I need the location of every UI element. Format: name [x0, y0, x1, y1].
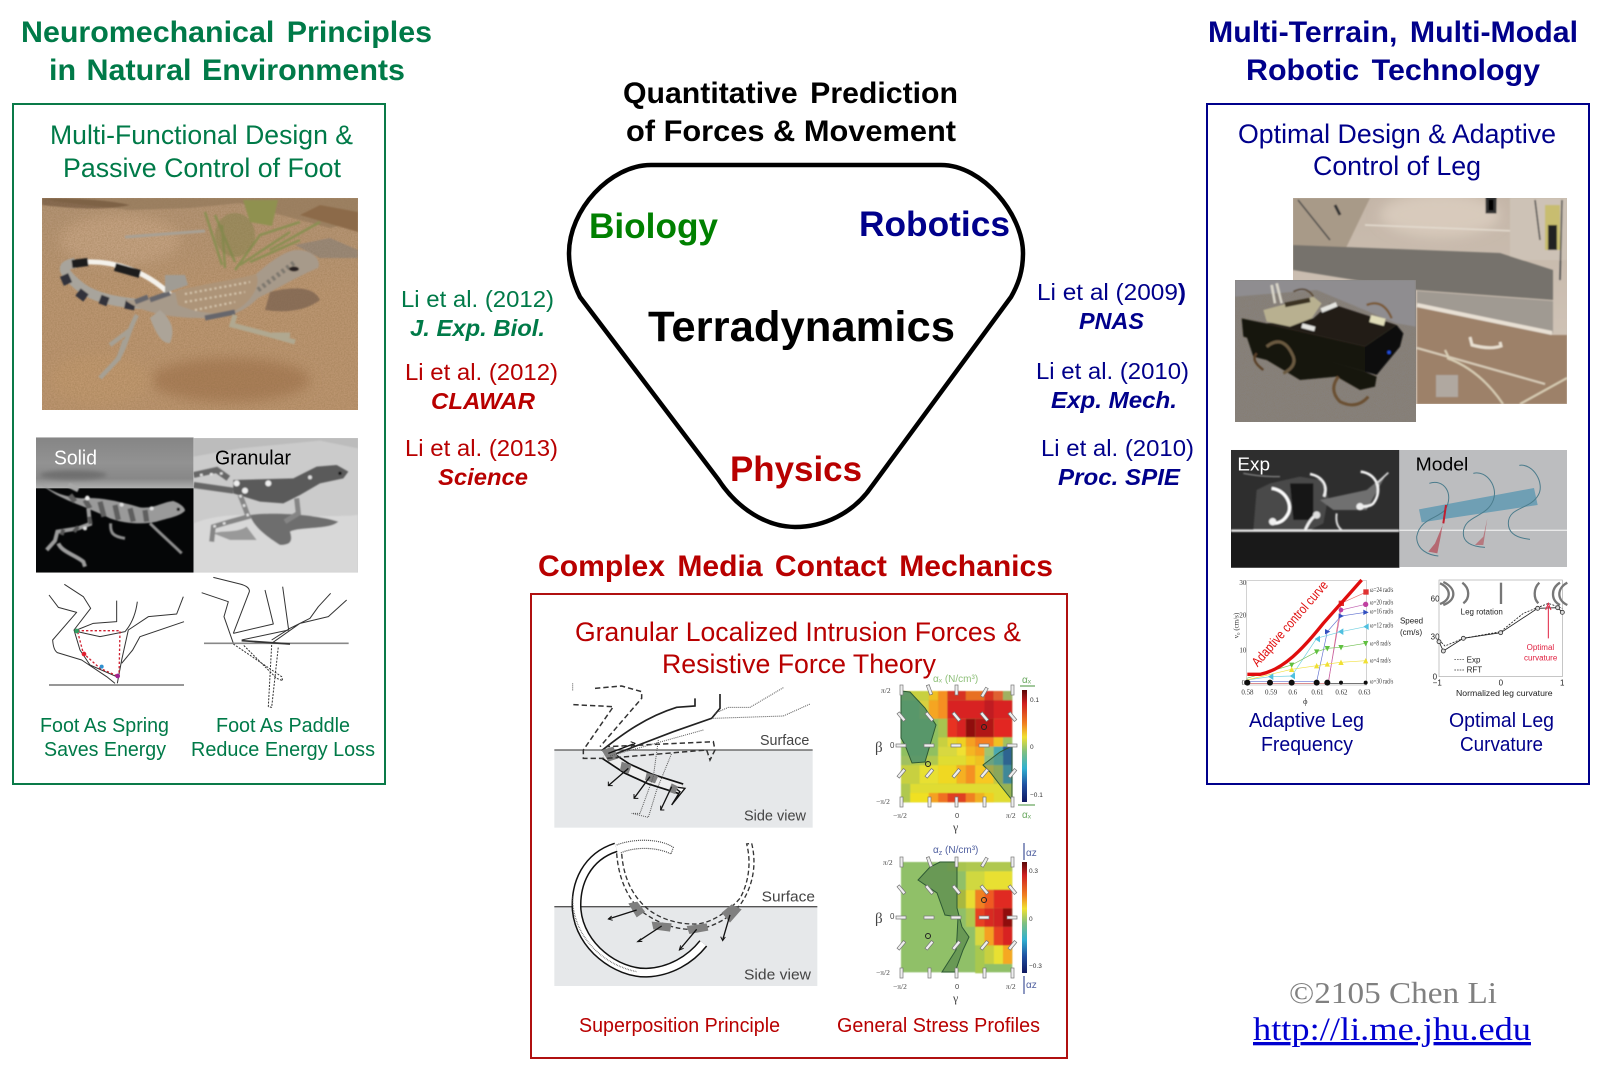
panel heading: Multi-Functional Design &	[50, 120, 353, 150]
chart: stress profile alpha z	[875, 843, 1042, 1005]
diagram: superposition c-shaped leg: Surface	[762, 890, 815, 906]
colorbar: 0.1	[1030, 697, 1039, 704]
citation: j exp biol: J. Exp. Biol.	[410, 315, 545, 341]
image: experiment x-ray: Exp	[1237, 454, 1270, 475]
panel heading	[1238, 119, 1556, 181]
citation: science: Science	[438, 464, 528, 490]
axis labels	[875, 674, 1032, 834]
axis labels: α	[933, 845, 939, 856]
caption: optimal leg curvature: Optimal Leg	[1449, 710, 1554, 732]
chart: adaptive leg frequency: 0.58	[1241, 689, 1254, 697]
diagram: superposition side view leg: Surface	[760, 733, 809, 749]
lizard legs	[150, 310, 172, 343]
citation: exp mech	[1036, 358, 1189, 413]
axis labels: π/2	[1006, 811, 1016, 820]
chart: adaptive leg frequency: 0.63	[1358, 689, 1371, 697]
caption: foot as paddle: Foot As Paddle	[216, 715, 350, 737]
diagram: superposition side view leg	[554, 683, 813, 828]
image: model simulation	[1399, 450, 1567, 567]
citation: clawar: CLAWAR	[431, 388, 535, 414]
axis labels: αₓ	[1022, 675, 1032, 686]
colorbar: −0.1	[1030, 792, 1043, 799]
axis labels: −π/2	[876, 797, 890, 806]
axis labels: 0	[890, 912, 895, 921]
axis labels: αₓ	[1022, 810, 1032, 821]
photo: lizard on sand	[42, 198, 358, 410]
citations: right column	[1036, 279, 1194, 490]
title: neuromechanical principles: Neuromechanical Principles	[21, 16, 432, 49]
copyright: ©2105 Chen Li	[1289, 975, 1497, 1010]
axis labels	[875, 845, 1037, 1005]
title: neuromechanical principles	[21, 16, 432, 87]
axis labels: π/2	[881, 686, 891, 695]
heading: quantitative prediction: of Forces & Movement	[626, 115, 956, 148]
panel heading	[50, 120, 353, 183]
axis labels: αz	[1026, 848, 1037, 859]
label: robotics: Robotics	[859, 205, 1010, 244]
chart: optimal leg curvature: Exp	[1467, 655, 1481, 664]
chart: optimal leg curvature: RFT	[1467, 666, 1482, 675]
chart: adaptive leg frequency: 0.62	[1335, 689, 1348, 697]
citation: proc spie: Li et al. (2010)	[1041, 435, 1194, 461]
axis labels: β	[875, 911, 883, 927]
panel heading: Optimal Design & Adaptive	[1238, 119, 1556, 149]
title: multi-terrain robotic technology: Multi-Terrain, Multi-Modal	[1208, 16, 1578, 49]
citation: science: Li et al. (2013)	[405, 435, 558, 461]
heatmap cells	[901, 862, 1012, 973]
label: physics: Physics	[730, 450, 862, 489]
photo: solid lizard: Solid	[54, 447, 97, 469]
chart: adaptive leg frequency: 10	[1239, 647, 1247, 655]
citation: pnas: PNAS	[1079, 308, 1145, 334]
colorbar: −0.3	[1029, 963, 1042, 970]
colorbar	[1022, 862, 1042, 973]
chart: adaptive leg frequency: 0	[1242, 679, 1246, 687]
citation: proc spie: Proc. SPIE	[1058, 464, 1181, 490]
colorbar: 0.3	[1029, 868, 1038, 875]
chart: optimal leg curvature: Speed	[1400, 616, 1423, 625]
chart: optimal leg curvature: 30	[1431, 632, 1440, 641]
photo: granular lizard: Granular	[215, 447, 291, 469]
chart: adaptive leg frequency: ω=12 rad/s	[1370, 621, 1394, 629]
colorbar: 0	[1029, 916, 1033, 923]
chart: optimal leg curvature: 0	[1499, 678, 1504, 687]
heading: quantitative prediction	[623, 77, 958, 148]
photo: sandbot robot	[1235, 280, 1416, 422]
label: biology: Biology	[589, 207, 719, 246]
photo: solid lizard	[36, 437, 194, 573]
chart: adaptive leg frequency: 30	[1239, 579, 1247, 587]
lizard body	[125, 250, 319, 318]
caption: general stress profiles: General Stress Profiles	[837, 1015, 1040, 1037]
caption: adaptive leg frequency: Adaptive Leg	[1249, 710, 1364, 732]
chart: stress profile alpha x	[875, 674, 1043, 834]
axis labels: −π/2	[893, 982, 907, 991]
axis labels: β	[875, 740, 883, 756]
citations: left column	[401, 286, 558, 490]
axis labels: −π/2	[893, 811, 907, 820]
chart: optimal leg curvature: Optimal	[1527, 643, 1554, 652]
axis labels: γ	[952, 820, 959, 834]
title: complex media contact mechanics: Complex Media Contact Mechanics	[538, 550, 1053, 583]
caption: foot as paddle: Reduce Energy Loss	[191, 739, 375, 761]
diagram: superposition c-shaped leg	[554, 840, 817, 986]
panel: physics	[531, 594, 1067, 1058]
chart: adaptive leg frequency: Adaptive control curve	[1249, 578, 1331, 669]
panel heading: Control of Leg	[1313, 151, 1481, 181]
axis labels: αz	[1026, 980, 1037, 991]
citation: science	[405, 435, 558, 490]
chart: adaptive leg frequency	[1233, 578, 1394, 706]
colorbar	[1022, 690, 1043, 802]
chart: optimal leg curvature: 1	[1560, 678, 1565, 687]
chart: adaptive leg frequency: ω=8 rad/s	[1370, 639, 1391, 647]
leg markers	[896, 685, 1017, 807]
chart: optimal leg curvature: Leg rotation	[1461, 608, 1503, 617]
photo: granular trackway	[1293, 193, 1567, 404]
stable regions	[901, 691, 1012, 800]
chart: adaptive leg frequency: ω=20 rad/s	[1370, 598, 1394, 606]
diagram: superposition c-shaped leg: Side view	[744, 967, 811, 983]
heading: quantitative prediction: Quantitative Prediction	[623, 77, 958, 110]
chart: adaptive leg frequency: v₀ (cm/s)	[1233, 612, 1241, 638]
axis labels: π/2	[883, 858, 893, 867]
citation: proc spie	[1041, 435, 1194, 490]
chart: adaptive leg frequency: 0.59	[1265, 689, 1278, 697]
axis labels: −π/2	[876, 968, 890, 977]
caption: adaptive leg frequency	[1249, 710, 1364, 756]
panel heading: Granular Localized Intrusion Forces &	[575, 617, 1021, 647]
caption: foot as spring	[40, 715, 169, 761]
chart: optimal leg curvature: −1	[1433, 678, 1442, 687]
citation: j exp biol	[401, 286, 554, 341]
caption: adaptive leg frequency: Frequency	[1261, 734, 1353, 756]
axis labels: γ	[952, 991, 959, 1005]
chart: optimal leg curvature	[1400, 580, 1567, 698]
chart: adaptive leg frequency: ω=16 rad/s	[1370, 607, 1394, 615]
colorbar: 0	[1030, 744, 1034, 751]
chart: adaptive leg frequency: 0.61	[1311, 689, 1324, 697]
diagram: superposition side view leg: Side view	[744, 809, 806, 825]
axis labels: 0	[955, 811, 959, 820]
website link: http://li.me.jhu.edu	[1253, 1012, 1531, 1048]
panel: biology	[13, 104, 385, 784]
citation: exp mech: Exp. Mech.	[1051, 387, 1177, 413]
caption: foot as paddle	[191, 715, 375, 761]
chart: adaptive leg frequency: ω=4 rad/s	[1370, 657, 1391, 665]
chart: optimal leg curvature: 60	[1431, 595, 1440, 604]
chart: optimal leg curvature: Normalized leg curvature	[1456, 689, 1553, 698]
citation: j exp biol: Li et al. (2012)	[401, 286, 554, 312]
caption: superposition principle: Superposition Principle	[579, 1015, 780, 1037]
caption: optimal leg curvature: Curvature	[1460, 734, 1543, 756]
citation: exp mech: Li et al. (2010)	[1036, 358, 1189, 384]
axis labels: αₓ (N/cm³)	[933, 674, 978, 685]
panel heading: Passive Control of Foot	[63, 153, 341, 183]
chart: adaptive leg frequency: 20	[1239, 611, 1247, 619]
diagram: foot as paddle	[202, 577, 349, 707]
heatmap cells	[901, 691, 1012, 802]
image: experiment x-ray	[1231, 450, 1399, 568]
citation: clawar	[405, 359, 558, 414]
chart: optimal leg curvature: 0	[1433, 672, 1438, 681]
chart: adaptive leg frequency: ϕ	[1303, 696, 1308, 706]
stable regions	[918, 862, 969, 972]
diagram: foot as spring	[49, 584, 184, 685]
photo: granular lizard	[194, 438, 358, 573]
leg markers	[896, 857, 1017, 978]
panel heading: Resistive Force Theory	[662, 649, 936, 679]
caption: foot as spring: Foot As Spring	[40, 715, 169, 737]
citation: pnas	[1037, 279, 1186, 334]
label: terradynamics: Terradynamics	[648, 303, 955, 351]
caption: optimal leg curvature	[1449, 710, 1554, 756]
citation: clawar: Li et al. (2012)	[405, 359, 558, 385]
axis labels: π/2	[1006, 982, 1016, 991]
title: neuromechanical principles: in Natural Environments	[49, 54, 405, 87]
chart: adaptive leg frequency: ω=24 rad/s	[1370, 586, 1394, 594]
chart: adaptive leg frequency: ω=30 rad/s	[1370, 677, 1394, 685]
caption: foot as spring: Saves Energy	[44, 739, 166, 761]
axis labels: 0	[890, 741, 895, 750]
chart: adaptive leg frequency: 0.6	[1288, 689, 1298, 697]
axis labels: (N/cm³)	[942, 845, 978, 856]
title: multi-terrain robotic technology	[1208, 16, 1578, 87]
panel: robotics	[1207, 104, 1589, 784]
title: multi-terrain robotic technology: Robotic Technology	[1246, 54, 1540, 87]
axis labels: 0	[955, 982, 959, 991]
citation: pnas: Li et al (2009 )	[1037, 279, 1186, 305]
diagram: terradynamics rounded triangle	[569, 165, 1023, 527]
chart: optimal leg curvature: (cm/s)	[1400, 628, 1423, 637]
chart: optimal leg curvature: curvature	[1524, 653, 1558, 662]
lizard tail	[64, 262, 178, 306]
axis labels: z	[939, 850, 943, 857]
panel heading	[575, 617, 1021, 679]
image: model simulation: Model	[1416, 454, 1468, 475]
